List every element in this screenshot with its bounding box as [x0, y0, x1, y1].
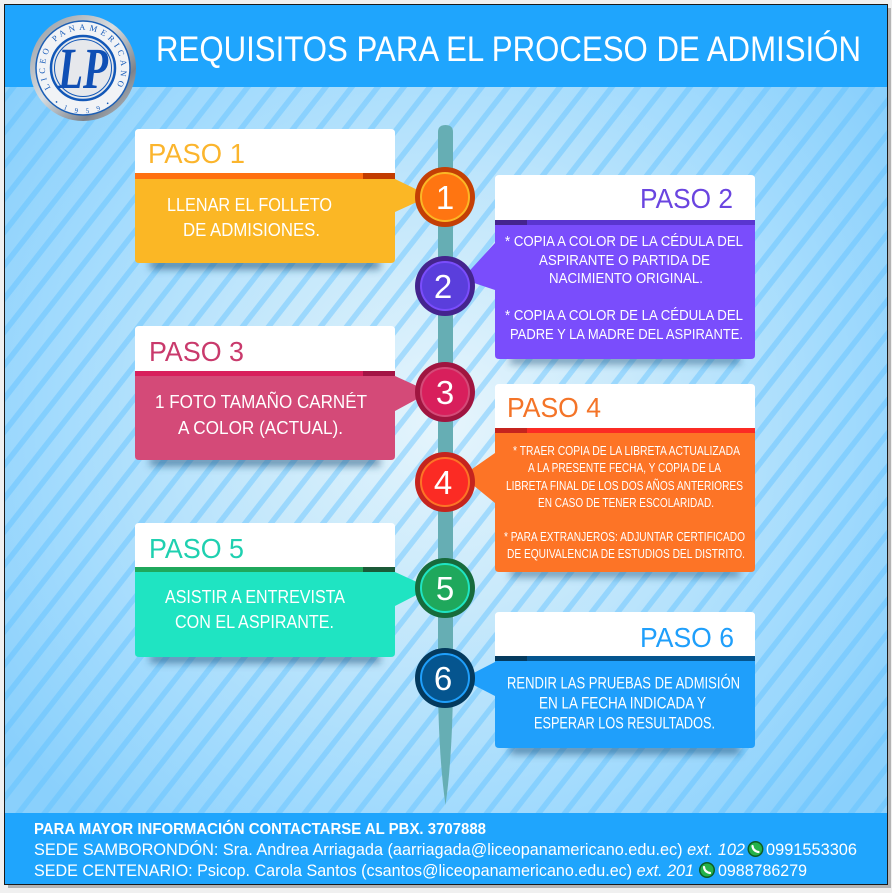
- header band: [5, 5, 887, 87]
- text 2: * COPIA A COLOR DE LA CÉDULA DEL: [505, 233, 743, 250]
- panel: paso 3: [135, 326, 430, 466]
- number badge 1: [415, 167, 475, 227]
- card shadow 3: [150, 457, 380, 466]
- logo: Liceo Panamericano seal: LICEO PANAMERICANO: [39, 24, 127, 90]
- logo: Liceo Panamericano seal: [30, 15, 136, 121]
- heading 2: PASO 2: [640, 183, 733, 214]
- card shadow 1: [150, 260, 380, 269]
- number badge 4: [415, 452, 475, 512]
- number badge 6: [415, 648, 475, 708]
- number badge 3: [415, 362, 475, 422]
- text 5: [165, 587, 345, 632]
- heading 1: PASO 1: [148, 138, 245, 169]
- card shadow 6: [510, 745, 740, 754]
- logo: Liceo Panamericano seal: LP: [57, 36, 108, 101]
- card shadow 4: [510, 569, 740, 577]
- card body 1: [135, 175, 430, 263]
- text 3: [155, 391, 367, 438]
- text 6: RENDIR LAS PRUEBAS DE ADMISIÓN: [507, 674, 740, 692]
- card body 4: [462, 430, 755, 572]
- panel: paso 5: [135, 523, 430, 663]
- panel: paso 4: [462, 384, 755, 577]
- card header 2: [495, 175, 755, 220]
- footer contact heading: PARA MAYOR INFORMACIÓN CONTACTARSE AL PBX. 3707888: [34, 819, 486, 838]
- text 4: A LA PRESENTE FECHA, Y COPIA DE LA: [528, 460, 721, 475]
- card body 5: [135, 569, 430, 657]
- text 4: LIBRETA FINAL DE LOS DOS AÑOS ANTERIORES: [506, 478, 743, 493]
- text 1: LLENAR EL FOLLETO: [167, 195, 332, 215]
- panel: paso 2: [462, 175, 755, 364]
- text 3: A COLOR (ACTUAL).: [178, 418, 343, 438]
- number badge 5: [415, 558, 475, 618]
- footer line: Samborondón: SEDE SAMBORONDÓN: Sra. Andrea Arriagada (aarriagada@liceopanamericano.edu.ec) ext. 102: [34, 840, 745, 859]
- logo: Liceo Panamericano seal: • 1 9 5 9 •: [56, 101, 108, 114]
- number badge 3: 3: [436, 374, 454, 411]
- icon: whatsapp: [699, 862, 715, 878]
- card shadow 2: [510, 356, 740, 364]
- text 2: * COPIA A COLOR DE LA CÉDULA DEL: [505, 307, 743, 324]
- text 6: [507, 674, 740, 732]
- card header 4: [495, 384, 755, 428]
- card body 6: [462, 658, 755, 748]
- text 6: EN LA FECHA INDICADA Y: [539, 694, 706, 712]
- text 4: * PARA EXTRANJEROS: ADJUNTAR CERTIFICADO: [504, 529, 745, 544]
- text 5: ASISTIR A ENTREVISTA: [165, 587, 345, 607]
- footer line: Samborondón: 0991553306: [766, 841, 857, 859]
- card body 3: [135, 372, 430, 460]
- header bar 2: [495, 220, 755, 225]
- card header 6: [495, 612, 755, 656]
- heading 5: PASO 5: [149, 533, 244, 564]
- number badge 2: [415, 256, 475, 316]
- text 5: CON EL ASPIRANTE.: [175, 612, 334, 632]
- text 2: NACIMIENTO ORIGINAL.: [549, 271, 703, 287]
- text 6: ESPERAR LOS RESULTADOS.: [534, 714, 715, 732]
- timeline spine: [438, 125, 453, 805]
- card header 1: [135, 129, 395, 173]
- footer band: [5, 813, 887, 884]
- header bar 4: [495, 428, 755, 433]
- text 1: DE ADMISIONES.: [183, 220, 320, 240]
- text 2: [505, 233, 743, 343]
- header bar 6: [495, 656, 755, 661]
- heading 3: PASO 3: [149, 336, 244, 367]
- header bar 3: [135, 371, 395, 376]
- number badge 2: 2: [434, 268, 452, 305]
- card header 3: [135, 326, 395, 371]
- footer line: Centenario: 0988786279: [718, 862, 807, 880]
- text 2: ASPIRANTE O PARTIDA DE: [539, 253, 710, 269]
- text 4: [504, 443, 745, 561]
- text 4: DE EQUIVALENCIA DE ESTUDIOS DEL DISTRITO.: [507, 546, 745, 561]
- footer line: Centenario: SEDE CENTENARIO: Psicop. Carola Santos (csantos@liceopanamericano.edu.ec) ext. 201: [34, 862, 694, 880]
- card header 5: [135, 523, 395, 567]
- number badge 6: 6: [434, 660, 452, 697]
- text 3: 1 FOTO TAMAÑO CARNÉT: [155, 391, 367, 412]
- header bar 1: [135, 173, 395, 179]
- number badge 4: 4: [434, 464, 452, 501]
- text 4: EN CASO DE TENER ESCOLARIDAD.: [538, 495, 714, 510]
- text 1: [167, 195, 332, 240]
- number badge 5: 5: [436, 570, 454, 607]
- card shadow 5: [150, 654, 380, 663]
- panel: paso 1: [135, 129, 430, 269]
- number badge 1: 1: [436, 179, 454, 216]
- heading 4: PASO 4: [507, 392, 601, 423]
- text 2: PADRE Y LA MADRE DEL ASPIRANTE.: [510, 327, 743, 343]
- header bar 5: [135, 567, 395, 572]
- card body 2: [462, 222, 755, 359]
- icon: whatsapp: [748, 841, 764, 857]
- panel: paso 6: [462, 612, 755, 754]
- text 4: * TRAER COPIA DE LA LIBRETA ACTUALIZADA: [513, 443, 740, 458]
- heading 6: PASO 6: [640, 622, 734, 653]
